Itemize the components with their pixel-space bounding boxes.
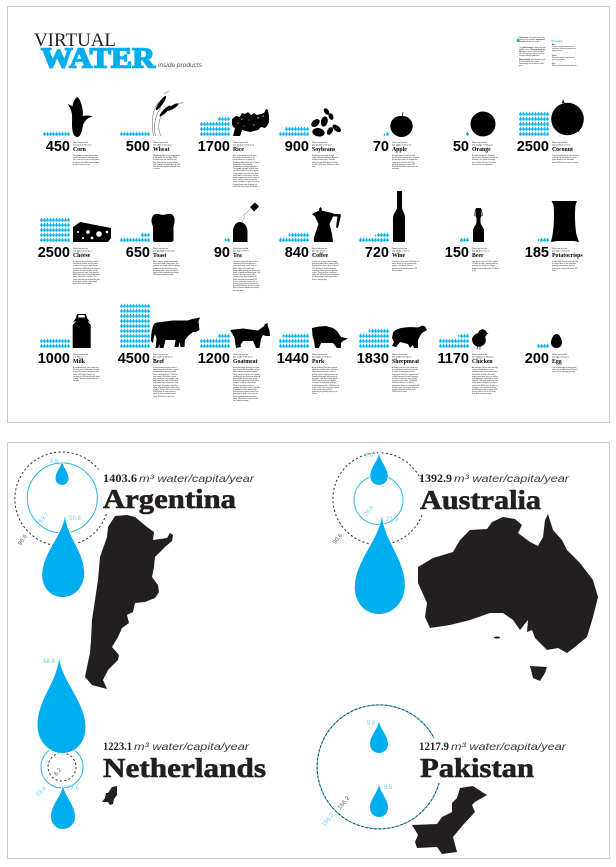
product: wine: One litre of wine takes 960 litres of water, most of it for growing the grapes. One bottle of three quarters of a litre thus takes 720 litres in total. bbox=[392, 261, 419, 272]
value: Netherlands: 1223.1 bbox=[103, 741, 132, 753]
product: soybeans: Soybeans bbox=[312, 147, 336, 153]
product: goat meat bbox=[198, 323, 270, 402]
product: toast: 650 bbox=[126, 245, 150, 261]
product: beef: Beef bbox=[153, 359, 164, 365]
product: beer: 150 bbox=[445, 245, 469, 261]
diagram: Pakistan water circles: 9.5 bbox=[384, 785, 393, 791]
value: Pakistan: 1217.9 bbox=[419, 741, 449, 753]
product: soybeans: Soybeans are grown in large areas of South and North America, mainly to feed cattle. One kilo takes around 1800 litres of water, so half a kilo takes 900 litres in the end. bbox=[312, 155, 339, 168]
diagram: Argentina water circles: 5.6 bbox=[50, 459, 59, 465]
legend text block: The global average is shown for every product in litres. One drop stands for fifty litres of water. Water use differs per country and per climate, per crop and per method of production. bbox=[519, 48, 546, 57]
product: toast: Toast bbox=[153, 253, 166, 259]
product: pork: Pork bbox=[312, 359, 325, 365]
title: inside products bbox=[158, 62, 203, 69]
product: milk: one litre of bbox=[73, 355, 83, 358]
product: rice: one portion of 500 gram bbox=[233, 143, 254, 146]
product: egg: 200 bbox=[525, 351, 549, 367]
value: Argentina: 1403.6 bbox=[103, 473, 137, 485]
legend text block: Water footprint sums the water used for all the goods and services consumed by one person in a whole year. bbox=[519, 60, 545, 67]
heading: Argentina: Argentina bbox=[103, 484, 237, 514]
diagram: Australia water circles: 9.0 bbox=[365, 453, 374, 459]
product: potato crisps bbox=[525, 201, 583, 272]
product: chicken bbox=[438, 329, 498, 395]
product: tea: one cup of 750 ml bbox=[233, 250, 249, 252]
heading: Pakistan: Pakistan bbox=[420, 753, 534, 783]
legend text block: Glossary bbox=[551, 39, 563, 43]
product: wheat bbox=[120, 90, 184, 170]
product: corn bbox=[43, 97, 100, 166]
product: pork: Water required for bbox=[312, 353, 328, 356]
product: beef: Water required for bbox=[153, 353, 169, 356]
product: milk: A cow drinks and eats a lot in her life, and most of the water is used to grow the feed. One litre of milk takes 1000 litres of water on average, or 200 litres for one glass of milk. This is far more than is in the milk. bbox=[73, 367, 100, 382]
product: egg bbox=[525, 334, 578, 373]
product: tea: Tea bbox=[233, 253, 242, 259]
product: orange bbox=[453, 112, 498, 166]
product: wheat: Wheat bbox=[153, 147, 169, 153]
product: sheep meat: one steak of 300 gram bbox=[392, 355, 412, 358]
product: rice: Water required for bbox=[233, 141, 249, 144]
product: wheat: Water required for bbox=[153, 141, 169, 144]
product: goat meat: Water required for bbox=[233, 353, 249, 356]
title: WATER bbox=[41, 44, 156, 74]
diagram: Netherlands water circles bbox=[35, 658, 86, 829]
product: wheat: one slice of 300 gram bbox=[153, 143, 172, 146]
product: pork: A pig of ninety kilos lives only for about ten months and is fed with a large amount of grain, such as barley, wheat, soybeans and corn. Growing this grain takes most of the water. One kilo of pork needs 4800 litres of water on a global average. So one steak of three hundred grams takes 1440 litres of water. Pork is the most eaten meat in the world today and the amounts are growing very fast in China. bbox=[312, 367, 339, 395]
diagram: Australia water circles: 26.6 bbox=[363, 504, 376, 518]
product: wine: Water required for bbox=[392, 247, 408, 250]
product: pork bbox=[277, 326, 348, 395]
product: pork: one steak of 300 gram bbox=[312, 355, 332, 358]
product: coconut: Coconut bbox=[552, 147, 573, 153]
product: wheat: 500 bbox=[126, 139, 150, 155]
diagram: Argentina water circles: 50.6 bbox=[69, 516, 81, 522]
product: toast: White toast is made from wheat flour, water and a little yeast. The water in the dough itself is nothing compared with that taken up by the wheat plant. One package of toast of four hundred grams takes 650 litres of water to make. bbox=[153, 261, 179, 276]
product: sheep meat: A sheep lives for a few years and is raised for its wool as well as for its meat. It eats grass for the largest part of its life, together with a small amount of grain. Growing all of this food takes a very large amount of rain water. The sheep itself also drinks. One kilo of sheepmeat takes on average 6100 litres of water. One steak of three hundred grams therefore takes 1830 litres of water. bbox=[392, 367, 419, 393]
product: potato crisps: 185 bbox=[525, 245, 549, 261]
product: coconut bbox=[517, 99, 584, 164]
product: milk bbox=[38, 314, 100, 382]
product: milk: 1000 bbox=[38, 351, 70, 367]
product: egg: Egg bbox=[552, 359, 562, 365]
panel: countries bbox=[8, 443, 609, 858]
product: corn: one corn of 200 gram bbox=[73, 143, 92, 146]
legend text block: Grey bbox=[552, 64, 556, 65]
value: Argentina: m³ water/capita/year bbox=[139, 473, 255, 485]
product: toast: Water required for bbox=[153, 247, 169, 250]
product: coffee: 840 bbox=[285, 245, 309, 261]
product: goat meat: Goatmeat bbox=[233, 359, 258, 365]
diagram: Australia water circles: 73.0 bbox=[386, 517, 398, 523]
product: soybeans bbox=[279, 108, 341, 168]
diagram: Argentina water circles bbox=[15, 452, 106, 597]
product: chicken: Chicken bbox=[472, 359, 493, 365]
value: Pakistan: m³ water/capita/year bbox=[451, 741, 567, 753]
diagram: Argentina water circles: 59.7 bbox=[38, 511, 51, 525]
product: goat meat: 1200 bbox=[198, 351, 230, 367]
diagram: Australia water circles: 90.6 bbox=[332, 532, 345, 546]
product: wine bbox=[359, 191, 419, 272]
panel: products bbox=[8, 7, 609, 422]
product: coconut: Coconut palms grow in the tropics and take up rain water for many years. A nut of one kilo takes about 2500 litres of water to grow. bbox=[552, 155, 578, 164]
product: coffee: Coffee has a large water content. Roasted coffee takes about 20000 litres per kilo. One cup of coffee of 125 ml takes 140 litres of water, including seven grams of ground coffee. One pot of six cups then takes 840 litres of water. People in the Netherlands drink more than three cups per day. bbox=[312, 261, 339, 281]
value: Australia bbox=[419, 473, 570, 485]
value: Netherlands bbox=[103, 741, 250, 753]
product: rice: 1700 bbox=[198, 139, 230, 155]
product: cheese: 2500 bbox=[38, 245, 70, 261]
product: potato crisps: one bag of 200 gram bbox=[552, 249, 570, 252]
product: tea: Tea comes from the leaves of an evergreen bush that grows in warm and rainy areas such as India, China, Sri Lanka and Kenya. After picking the leaves are dried, crushed and fermented. The water in the cup is just a tiny fraction of the total needed. To make one litre of tea about 120 litres of water are used in all, so one big pot of three quarters of a litre takes 90 litres of water in total. Most of the tea bushes are fed by the rain alone. bbox=[233, 261, 260, 292]
diagram: Argentina water circles: 96.6 bbox=[17, 533, 29, 547]
diagram: Australia water circles bbox=[332, 453, 422, 614]
product: cheese: one piece of 500 gram bbox=[73, 249, 93, 252]
product: beer: Beer bbox=[472, 253, 484, 259]
product: chicken: 1170 bbox=[438, 351, 469, 367]
map: Netherlands bbox=[102, 786, 117, 805]
product: orange: Orange bbox=[472, 147, 491, 153]
diagram: Netherlands water circles: 19.4 bbox=[35, 786, 48, 798]
product: rice: Rice is the staple food of more than half of the people in the world. Most of it is grown on flooded paddy fields, which lose a large amount of water by evaporation and by percolation. The global average is 3400 litres per kilo of milled rice. Rice grown in dry regions uses far more than rice grown in the tropics, and the water footprint of the rice eaten in one country is often located far away, in regions of export such as Thailand and India. A portion of half a kilo thus needs 1700 litres. bbox=[233, 155, 259, 188]
map: Argentina bbox=[85, 515, 173, 689]
diagram: Pakistan water circles: 166.2 bbox=[321, 812, 336, 828]
product: tea bbox=[214, 202, 260, 292]
product: chicken: Water required for bbox=[472, 353, 488, 356]
product: coffee bbox=[279, 207, 341, 281]
value: Australia: m³ water/capita/year bbox=[454, 473, 570, 485]
legend text block: Water polluted during the production. bbox=[552, 66, 577, 67]
product: sheep meat: Sheepmeat bbox=[392, 359, 419, 365]
product: rice bbox=[198, 109, 269, 188]
product: beef bbox=[118, 304, 200, 398]
product: toast: one package of 400 gram bbox=[153, 249, 176, 252]
diagram: Netherlands water circles: 57.6 bbox=[67, 786, 79, 792]
product: orange: 50 bbox=[453, 139, 469, 155]
product: coffee: Water required for bbox=[312, 247, 328, 250]
product: cheese: It takes ten litres of milk to make one kilo of cheese, so the water content of cheese is high. A cow needs about 1000 litres of water to produce one litre of milk, mostly for growing its feed. One piece of half a kilo of hard cheese therefore takes 2500 litres of water. The water used for processing the milk in the dairy is only a very small part of the total amount. bbox=[73, 261, 100, 285]
country: Argentina bbox=[15, 452, 255, 689]
product: beer: One glass of beer of 250 ml takes 75 litres of water, mostly used for growing the barley. So a large bottle of half a litre takes 150 litres in all. bbox=[472, 261, 499, 272]
product: wine: 720 bbox=[365, 245, 389, 261]
product: apple: Apple bbox=[392, 147, 407, 153]
product: goat meat: Goats are often raised on dry and poor land in Africa and Asia where other animals would not survive. They mostly eat grass and shrubs, so they use less feed from fields. A goat weighs far less than a cow and gives only about twenty kilos of meat. Its life is a lot shorter. Water is needed mostly for growing the plants it eats. One kilo of goatmeat takes around 4000 litres of water, which is much less than beef or lamb. One steak of three hundred grams therefore takes 1200 litres of water in total on a global average. bbox=[233, 367, 260, 402]
heading: Australia: Australia bbox=[420, 485, 542, 515]
product: wine: one bottle of 750 ml bbox=[392, 249, 410, 252]
product: cheese: Water required for bbox=[73, 247, 89, 250]
product: egg: Water required for bbox=[552, 353, 568, 356]
product: milk: Milk bbox=[73, 359, 86, 365]
product: goat meat: one steak of 300 gram bbox=[233, 355, 253, 358]
product: chicken: An average chicken lives for only seven or eight weeks on an industrial farm. It eats more than three kilos of feed in this time, mostly grain such as corn, wheat and soybeans, and drinks a small amount. This feed makes up most of the water needed. One kilo of meat takes 3900 litres of water on average, and a portion of three hundred grams takes about 1170 litres of water. This is far lower than beef, sheep or pork. bbox=[472, 367, 498, 395]
product: soybeans: Water required for bbox=[312, 141, 328, 144]
product: apple: A single apple of one hundred grams takes seventy litres of water on average, which is roughly the same as a short shower. One glass of apple juice takes 190 litres. Most of this is rain water on orchards. bbox=[392, 155, 419, 170]
heading: Netherlands: Netherlands bbox=[103, 753, 266, 783]
title: VIRTUAL bbox=[34, 30, 116, 51]
product: egg: one egg of 60 gram bbox=[552, 355, 569, 358]
product: tea: 90 bbox=[214, 245, 230, 261]
product: soybeans: 900 bbox=[285, 139, 309, 155]
product: sheep meat: Water required for bbox=[392, 353, 408, 356]
product: coffee: Coffee bbox=[312, 253, 329, 259]
product: potato crisps: Water required for bbox=[552, 247, 568, 250]
product: coffee: one can of 750 ml bbox=[312, 250, 328, 252]
product: tea: Water required for bbox=[233, 247, 249, 250]
product: orange: Water required for bbox=[472, 141, 488, 144]
product: milk: Water required for bbox=[73, 353, 89, 356]
product: beer bbox=[445, 208, 499, 272]
product: wine: Wine bbox=[392, 253, 406, 259]
legend text block: Green bbox=[552, 56, 556, 57]
value: Netherlands: m³ water/capita/year bbox=[134, 741, 250, 753]
product: corn: Water required for bbox=[73, 141, 89, 144]
product: sheep meat bbox=[357, 326, 427, 393]
product: chicken: one chicken of 300 gram bbox=[472, 355, 494, 358]
diagram: Netherlands water circles: 68.8 bbox=[43, 659, 55, 665]
product: pork: 1440 bbox=[277, 351, 309, 367]
product: toast bbox=[120, 214, 180, 276]
value: Pakistan bbox=[419, 741, 567, 753]
product: coconut: 2500 bbox=[517, 139, 549, 155]
product: cheese bbox=[38, 218, 111, 285]
product: apple: one apple of 100 gram bbox=[392, 143, 412, 146]
diagram: Pakistan water circles bbox=[317, 705, 439, 829]
product: corn: Corn bbox=[73, 147, 87, 153]
product: cheese: Cheese bbox=[73, 253, 91, 259]
product: rice: Rice bbox=[233, 147, 244, 153]
country: Pakistan bbox=[317, 705, 567, 854]
value: Argentina bbox=[103, 473, 255, 485]
product: apple: Water required for bbox=[392, 141, 408, 144]
product: beef: 4500 bbox=[118, 351, 150, 367]
product: sheep meat: 1830 bbox=[357, 351, 389, 367]
product: coconut: one coconut of 1 kilo bbox=[552, 143, 570, 146]
product: beer: one bottle of 500 ml bbox=[472, 249, 490, 252]
product: beer: Water required for bbox=[472, 247, 488, 250]
legend text block bbox=[516, 36, 578, 67]
map: Pakistan bbox=[412, 786, 487, 854]
product: apple: 70 bbox=[373, 139, 389, 155]
product: potato crisps: It takes 925 litres of water per kilo of crisps. Most of this goes into growing the potatoes and into making oil, so one bag takes 185 litres. bbox=[552, 261, 578, 272]
diagram: Pakistan water circles: 166.2 bbox=[337, 795, 352, 811]
product: beef: one steak of 300 gram bbox=[153, 355, 173, 358]
product: corn: The global average virtual water content of maize is 900 litres per kilo. One ear of corn of 500 grams therefore takes 450 litres of water to grow, most of it rain. bbox=[73, 155, 99, 166]
product: wheat: Wheat is grown nearly everywhere in the world. On average, 1300 litres of water are used for one kilo, although the amount differs with climate and yield. Around 500 litres go into one loaf of bread flour in a year. bbox=[153, 155, 180, 170]
product: egg: One chicken egg of sixty grams takes two hundred litres of water, most of it for growing the feed. bbox=[552, 367, 578, 373]
diagram: Netherlands water circles: 8.2 bbox=[53, 767, 64, 777]
product: apple bbox=[373, 112, 419, 170]
legend text block: Rain water stored in the soil and taken up by plants. bbox=[552, 58, 574, 61]
country: Netherlands bbox=[35, 658, 266, 829]
product: orange: one orange of 100 gram bbox=[472, 143, 493, 146]
product: soybeans: one pound of 500 gram bbox=[312, 143, 333, 146]
diagram: Pakistan water circles: 9.6 bbox=[367, 721, 376, 727]
product: corn: 450 bbox=[46, 139, 70, 155]
country: Australia bbox=[332, 453, 598, 681]
value: Australia: 1392.9 bbox=[419, 473, 452, 485]
legend text block: Virtual water is the water used in the production of a product, measured at the place where it was made. bbox=[519, 38, 545, 43]
legend text block: Surface and ground water that is used up in making the product and does not return. bbox=[552, 47, 576, 52]
legend text block: Blue bbox=[552, 45, 555, 46]
map: Australia bbox=[418, 514, 598, 681]
product: orange: A single orange of a hundred grams takes fifty litres of water on average. One glass of orange juice of 200 ml takes 170 litres, since the fruit is squeezed. bbox=[472, 155, 498, 166]
product: potato crisps: Potatocrisps bbox=[552, 253, 583, 259]
product: beef: In an industrial system it takes about three years before a cow is slaughtered to give about 200 kilos of boneless beef. The cow eats nearly 1300 kilos of grain, such as wheat, oats, barley, corn and soybeans, and 7200 kilos of roughages such as pasture, hay and silage. To produce all of this takes more than three million litres of water. So one kilo of beef needs 15000 litres of water and one steak of three hundred grams takes 4500 litres in the end. bbox=[153, 367, 180, 398]
product: coconut: Water required for bbox=[552, 141, 568, 144]
title bbox=[34, 30, 203, 74]
